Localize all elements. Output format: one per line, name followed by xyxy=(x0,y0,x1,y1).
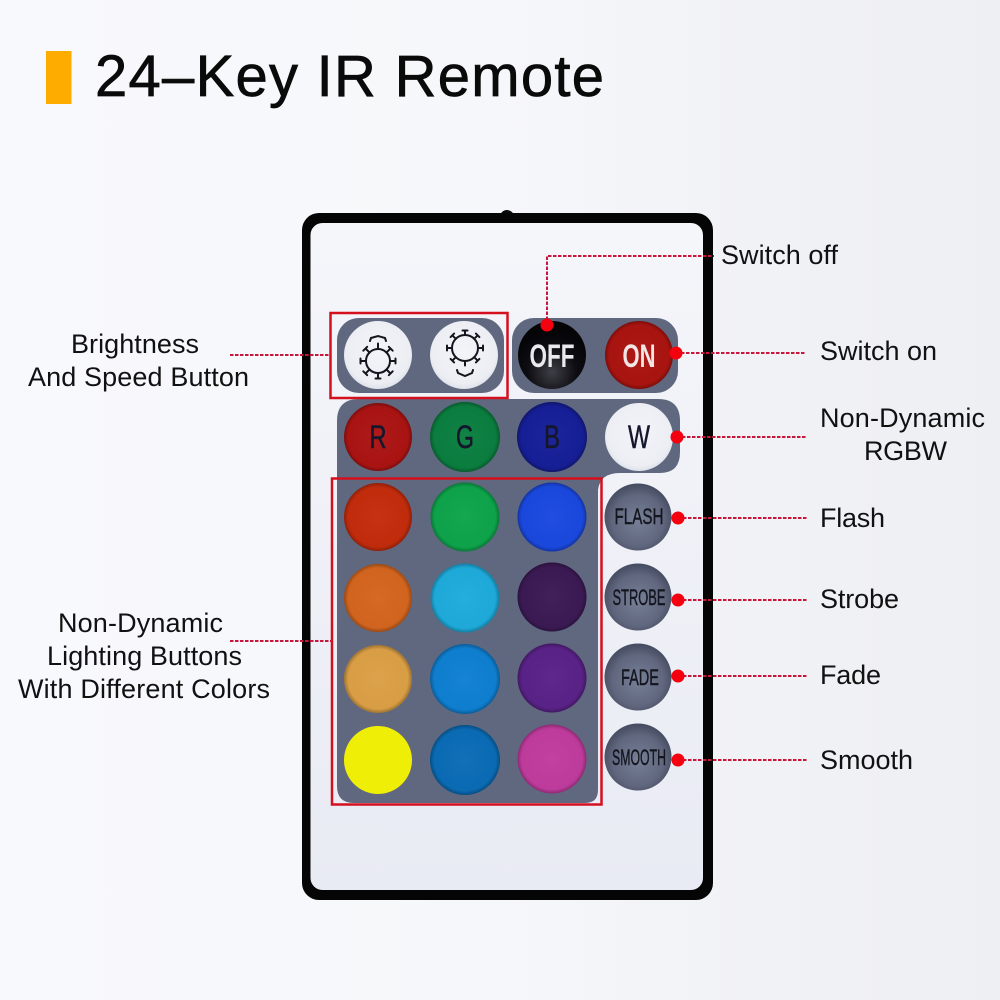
button: G xyxy=(430,402,500,472)
title: 24–Key IR Remote xyxy=(95,44,604,109)
callout: switch on xyxy=(670,336,937,366)
button: brightness down xyxy=(430,321,498,389)
panel: colour buttons xyxy=(337,399,680,803)
button: B: B xyxy=(544,419,560,455)
highlight box: lighting buttons xyxy=(332,478,602,804)
callout: RGBW xyxy=(670,403,985,466)
button: G: G xyxy=(456,419,474,455)
callout: fade xyxy=(672,660,881,690)
button: on xyxy=(605,321,673,389)
button: smooth xyxy=(604,724,672,790)
callout: lighting buttons: Non-Dynamic xyxy=(58,608,223,638)
callout: flash: Flash xyxy=(820,503,885,533)
panel: power buttons xyxy=(512,318,678,393)
callout: flash xyxy=(672,503,885,533)
callout: smooth: Smooth xyxy=(820,745,913,775)
button: B xyxy=(517,402,587,472)
accent bar xyxy=(46,51,72,104)
button: brightness up xyxy=(344,321,412,389)
callout: switch on: Switch on xyxy=(820,336,937,366)
callout: switch off xyxy=(540,240,838,332)
button: W xyxy=(605,403,673,471)
remote body xyxy=(302,210,713,900)
button: flash: FLASH xyxy=(614,504,664,529)
button: R xyxy=(344,403,412,471)
highlight box: brightness xyxy=(330,313,508,398)
callout: smooth xyxy=(672,745,913,775)
button: fade: FADE xyxy=(621,665,659,690)
button: R: R xyxy=(370,419,386,455)
callout: lighting buttons: Lighting Buttons xyxy=(47,641,242,671)
callout: RGBW: RGBW xyxy=(864,436,948,466)
button: flash xyxy=(604,484,672,550)
button: off xyxy=(518,321,586,389)
button: W: W xyxy=(628,419,651,455)
callout: lighting buttons: With Different Colors xyxy=(18,674,270,704)
button: fade xyxy=(604,644,672,710)
callout: RGBW: Non-Dynamic xyxy=(820,403,985,433)
callout: strobe xyxy=(672,584,899,614)
callout: strobe: Strobe xyxy=(820,584,899,614)
callout: brightness: And Speed Button xyxy=(28,362,249,392)
button: on: ON xyxy=(622,338,656,374)
callout: brightness xyxy=(28,329,330,392)
button: off: OFF xyxy=(530,338,574,374)
button: strobe xyxy=(604,564,672,630)
panel: brightness buttons xyxy=(337,318,504,393)
callout: switch off: Switch off xyxy=(721,240,838,270)
remote control xyxy=(302,210,713,900)
callout: lighting buttons xyxy=(18,608,332,704)
colour buttons grid xyxy=(344,482,586,795)
callout: brightness: Brightness xyxy=(71,329,199,359)
button: smooth: SMOOTH xyxy=(612,745,666,770)
callout: fade: Fade xyxy=(820,660,881,690)
button: strobe: STROBE xyxy=(612,585,666,610)
